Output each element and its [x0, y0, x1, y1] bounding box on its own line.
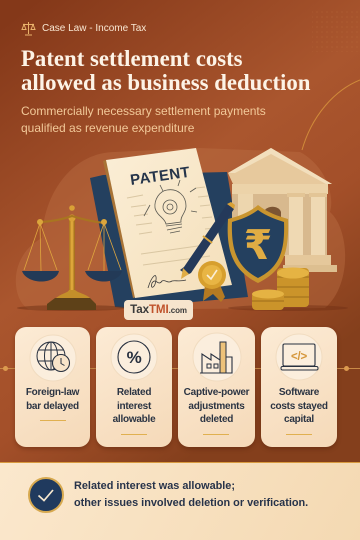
logo badge	[124, 300, 193, 320]
card text	[184, 387, 250, 425]
icon: scales	[21, 22, 36, 36]
footer text: Related interest was allowable;	[74, 480, 235, 492]
header label	[21, 22, 146, 36]
card text: Related	[117, 387, 151, 398]
card text	[112, 387, 156, 425]
card text: adjustments	[188, 400, 245, 412]
title	[21, 46, 310, 95]
card text	[270, 387, 328, 425]
title: Patent settlement costs	[21, 46, 243, 71]
underline	[203, 434, 229, 435]
card text: bar delayed	[26, 400, 79, 412]
hero illustration	[17, 148, 348, 311]
icon: percent	[110, 334, 158, 380]
document heading: PATENT	[129, 164, 191, 189]
card: foreign-law bar	[15, 327, 90, 447]
footer panel	[0, 462, 360, 540]
seal badge	[198, 261, 226, 302]
underline	[121, 434, 147, 435]
footer text: other issues involved deletion or verification.	[74, 496, 308, 508]
icon: globe and clock	[30, 334, 76, 380]
icon: light bulb with gear	[144, 180, 197, 233]
card: related interest	[96, 327, 172, 447]
card text: Captive-power	[184, 387, 249, 398]
card text: costs stayed	[270, 400, 328, 412]
rupee symbol: ₹	[244, 221, 272, 269]
pen	[180, 202, 235, 279]
icon: check badge	[28, 477, 64, 513]
logo badge: TaxTMI.com	[130, 303, 187, 316]
bank building	[228, 148, 337, 272]
card text	[26, 387, 80, 412]
underline	[286, 434, 312, 435]
connector dot right	[344, 366, 349, 371]
icon: factory	[192, 332, 242, 380]
icon: percent: %	[127, 348, 142, 367]
card text: Foreign-law	[26, 387, 79, 398]
label text: Case Law - Income Tax	[42, 23, 146, 34]
card text: capital	[284, 414, 314, 425]
footer text	[74, 480, 308, 508]
signature	[148, 276, 186, 288]
icon: laptop with code	[276, 334, 322, 380]
patent document	[103, 148, 232, 298]
coins	[228, 268, 348, 311]
subtitle	[21, 104, 266, 135]
scales of justice	[17, 205, 127, 311]
subtitle: qualified as revenue expenditure	[21, 121, 194, 135]
connector dot left	[3, 366, 8, 371]
card text: deleted	[200, 414, 233, 425]
card text: Software	[279, 387, 319, 398]
shield with rupee	[228, 205, 288, 283]
binder	[90, 172, 248, 308]
card text: interest	[117, 400, 151, 412]
icon: laptop with code: </>	[291, 351, 307, 363]
card: captive power	[178, 327, 255, 447]
card: software costs	[261, 327, 337, 447]
connector line	[0, 368, 360, 369]
subtitle: Commercially necessary settlement payments	[21, 104, 266, 118]
underline	[40, 420, 66, 421]
card text: allowable	[113, 414, 155, 425]
title: allowed as business deduction	[21, 70, 310, 95]
